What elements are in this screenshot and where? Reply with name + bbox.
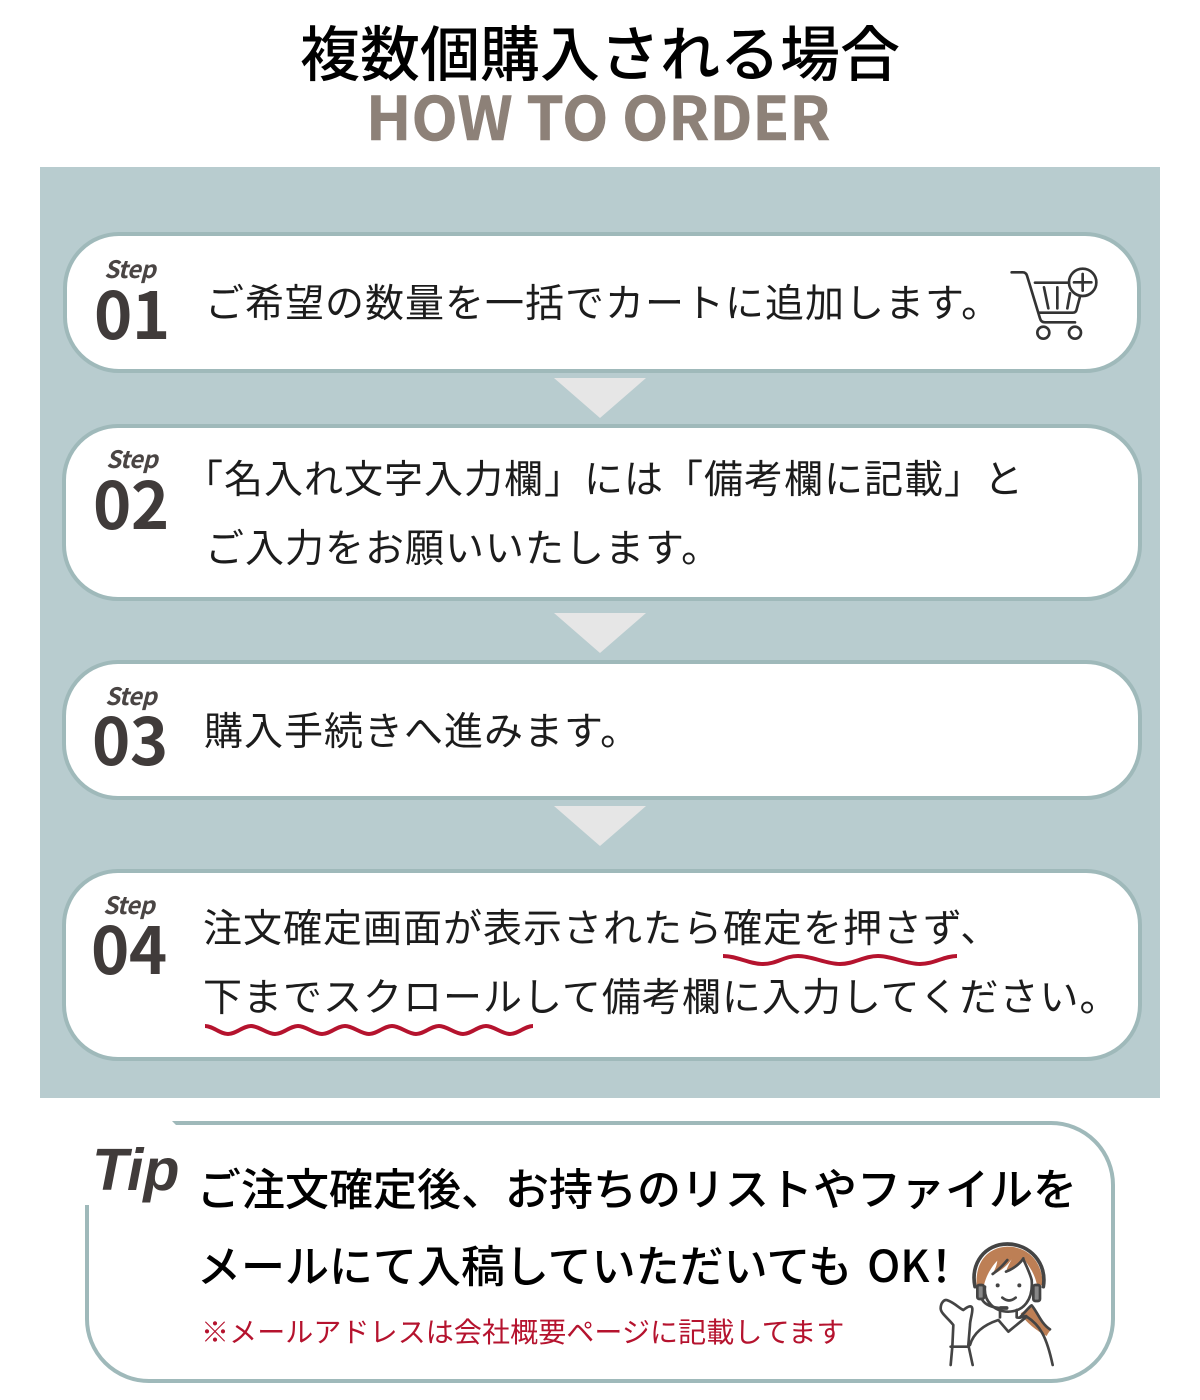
step 2 label: Step <box>106 440 157 475</box>
arrow 1 <box>554 378 646 418</box>
underline: wavy 2 <box>205 1024 533 1036</box>
step 2 text line 1: 「名入れ文字入力欄」には「備考欄に記載」と <box>184 449 1024 505</box>
panel: step 3 <box>62 660 1142 800</box>
subtitle: HOW TO ORDER <box>366 71 830 158</box>
step 4 number: 04 <box>91 899 167 993</box>
step 1 number: 01 <box>94 264 170 358</box>
step 2 number: 02 <box>93 454 169 548</box>
icon: operator with headset <box>939 1242 1054 1366</box>
panel: step 4 <box>62 869 1142 1061</box>
step 1 label: Step <box>104 250 155 285</box>
title: 複数個購入される場合 <box>300 7 900 94</box>
panel: step 1 <box>63 232 1141 373</box>
step 3 text: 購入手続きへ進みます。 <box>204 701 640 757</box>
tip text line 2: メールにて入稿していただいても OK！ <box>197 1231 963 1295</box>
step 4 text line 1: 注文確定画面が表示されたら確定を押さず、 <box>203 898 1000 954</box>
step 4 label: Step <box>103 886 154 921</box>
icon: cart with plus <box>1010 267 1098 340</box>
step 4 text line 2: 下までスクロールして備考欄に入力してください。 <box>203 967 1120 1023</box>
underline: wavy 1 <box>723 954 957 966</box>
panel: steps background <box>40 167 1160 1098</box>
arrow 2 <box>554 613 646 653</box>
tip label: Tip <box>92 1137 179 1203</box>
step 1 text: ご希望の数量を一括でカートに追加します。 <box>205 273 1001 329</box>
step 3 number: 03 <box>92 690 168 784</box>
tip note: ※メールアドレスは会社概要ページに記載してます <box>201 1311 845 1351</box>
tip text line 1: ご注文確定後、お持ちのリストやファイルを <box>197 1154 1077 1218</box>
step 2 text line 2: ご入力をお願いいたします。 <box>205 518 721 574</box>
step 3 label: Step <box>105 677 156 712</box>
tip label background <box>85 1121 176 1205</box>
panel: step 2 <box>62 424 1142 601</box>
panel: tip <box>85 1121 1115 1383</box>
arrow 3 <box>554 806 646 846</box>
